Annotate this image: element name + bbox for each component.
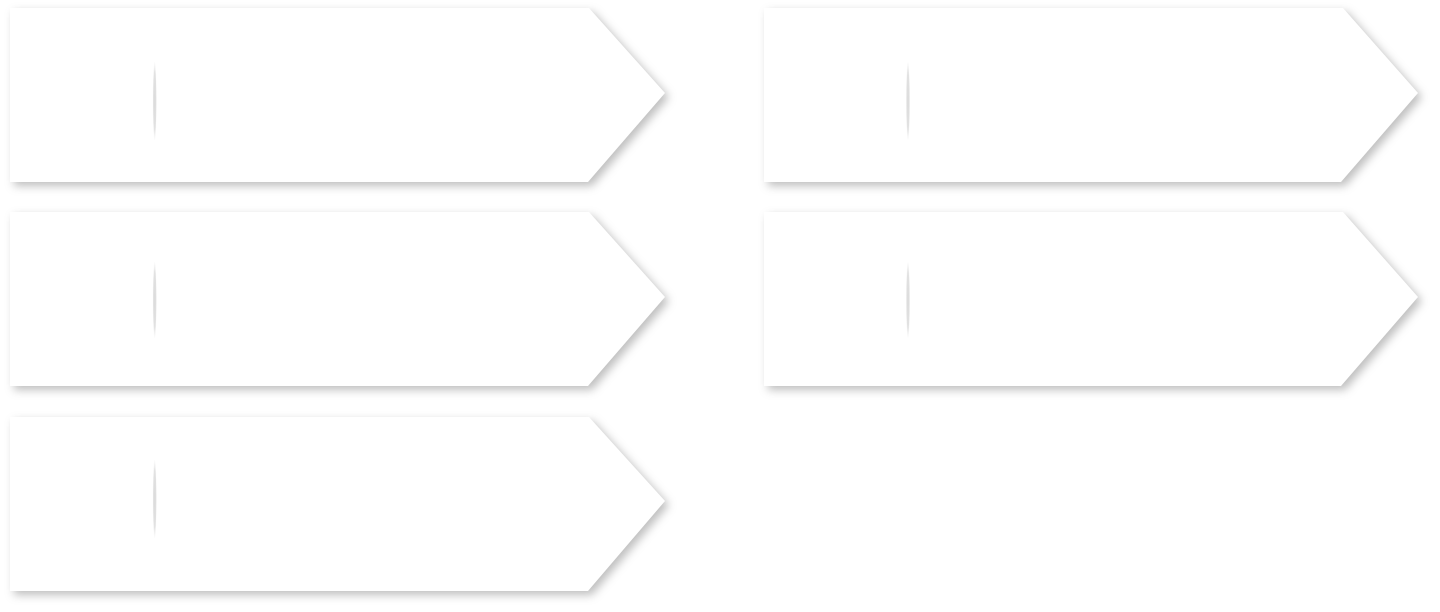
panel: arrow row 2 right bbox=[764, 212, 1418, 386]
divider: row 1 right bbox=[906, 62, 910, 140]
panel: arrow row 2 left bbox=[10, 212, 665, 386]
divider: row 2 left bbox=[153, 262, 157, 338]
panel: arrow row 1 right bbox=[764, 8, 1418, 182]
panel: arrow row 3 left bbox=[10, 417, 665, 591]
divider: row 3 left bbox=[153, 460, 157, 538]
divider: row 2 right bbox=[906, 262, 910, 338]
panel: arrow row 1 left bbox=[10, 8, 665, 182]
divider: row 1 left bbox=[153, 62, 157, 140]
